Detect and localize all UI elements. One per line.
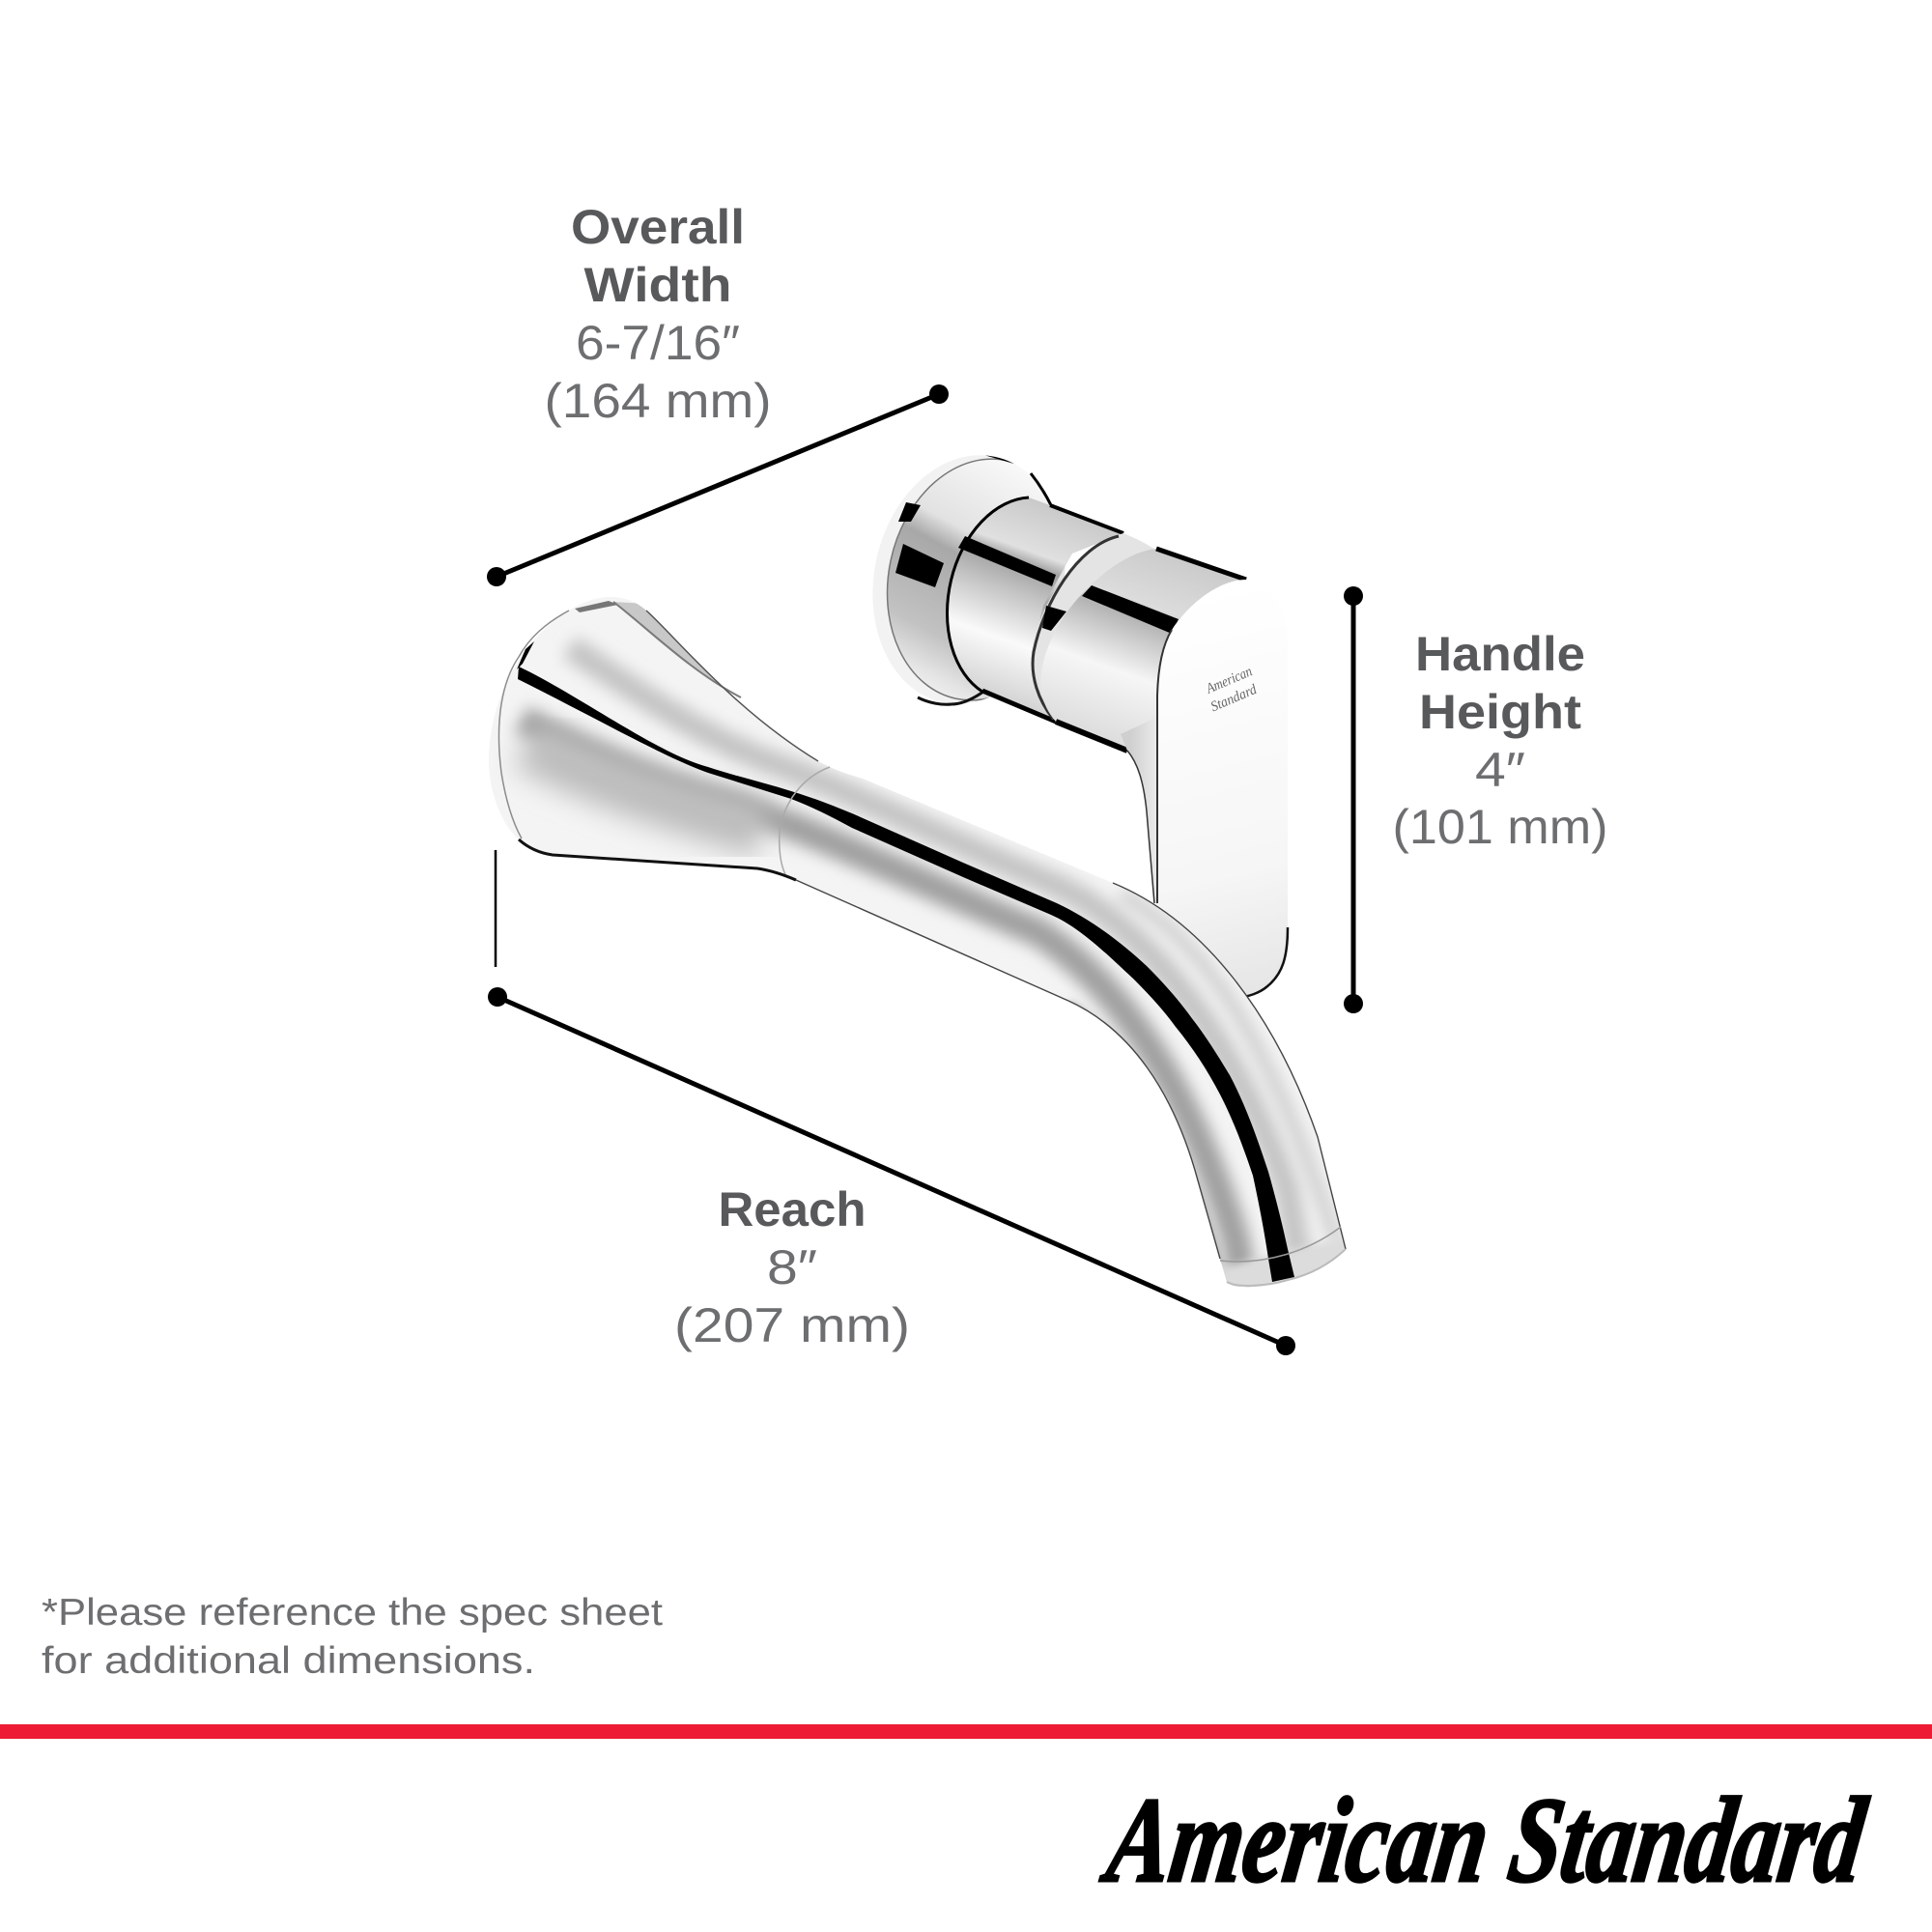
label: overall width: Overall — [571, 200, 745, 254]
label: reach — [674, 1182, 910, 1352]
dimension line: overall width — [487, 384, 949, 586]
chrome reflection stripe — [518, 667, 1294, 1282]
label: overall width: Width — [583, 258, 732, 312]
label: overall width — [545, 200, 771, 428]
dimension line: handle height — [1344, 586, 1363, 1013]
label: reach: 8″ — [767, 1240, 817, 1294]
spout tip ring — [1220, 1227, 1341, 1262]
spout shading — [522, 602, 1352, 1299]
engraved logo: Standard — [1208, 682, 1260, 715]
flange rim — [498, 611, 569, 838]
footnote — [42, 1592, 663, 1682]
dimension line: reach — [488, 850, 1295, 1355]
label: handle height: Handle — [1415, 627, 1585, 681]
faucet illustration — [489, 437, 1352, 1299]
spout joint line — [780, 767, 830, 874]
label: overall width: (164 mm) — [545, 374, 771, 428]
label: handle height — [1393, 627, 1607, 854]
label: handle height: Height — [1419, 685, 1581, 739]
label: handle height: (101 mm) — [1393, 800, 1607, 854]
label: handle height: 4″ — [1475, 743, 1525, 797]
flange highlight band — [614, 602, 717, 682]
label: reach: Reach — [719, 1182, 866, 1236]
footnote: for additional dimensions. — [42, 1640, 535, 1682]
wall plate — [873, 456, 1065, 706]
label: overall width: 6-7/16″ — [576, 316, 740, 370]
handle assembly — [850, 437, 1288, 998]
engraved logo — [1202, 664, 1262, 715]
label: reach: (207 mm) — [674, 1298, 910, 1352]
engraved logo: American — [1204, 664, 1255, 697]
handle front face — [1156, 580, 1288, 998]
cylinder body — [947, 497, 1123, 722]
flange highlight lines — [575, 601, 618, 612]
spout with flange — [489, 597, 1352, 1299]
red divider bar — [0, 1724, 1932, 1739]
footnote: *Please reference the spec sheet — [42, 1592, 663, 1634]
collar ring — [1032, 533, 1156, 720]
spout outline — [796, 880, 1346, 1259]
handle lever — [1040, 549, 1246, 908]
